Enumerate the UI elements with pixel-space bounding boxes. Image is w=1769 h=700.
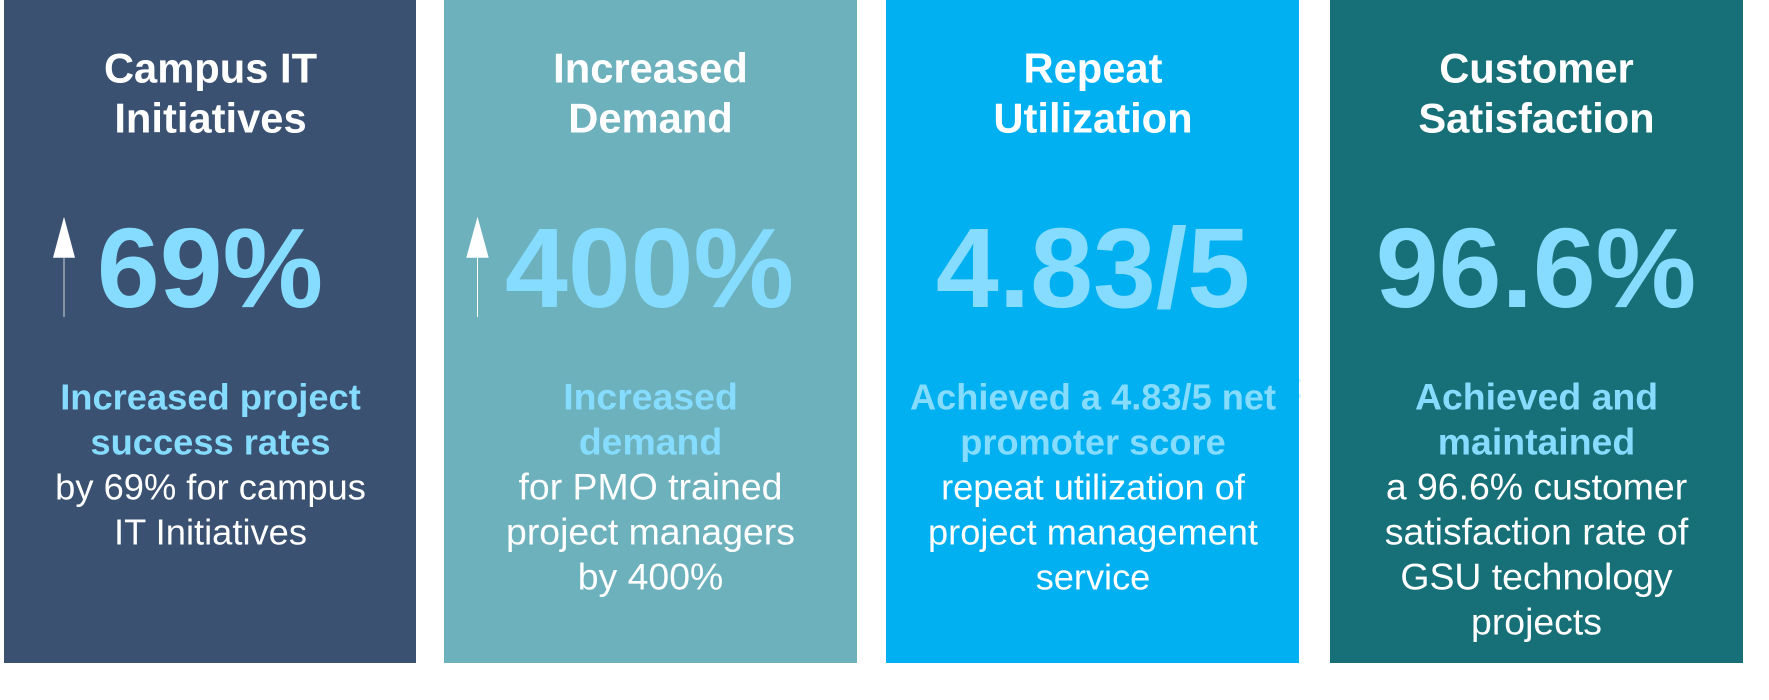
description: Achieved and (1415, 376, 1658, 418)
heading: Increased Demand: Increased (553, 44, 748, 92)
description: project management (928, 512, 1258, 552)
panel: Repeat Utilization (886, 0, 1301, 663)
heading: Campus IT Initiatives: Campus IT (104, 44, 318, 92)
big number: 69%: 69% (97, 205, 323, 331)
big number: 96.6%: 96.6% (1376, 205, 1696, 331)
description: maintained (1438, 420, 1635, 462)
description: success rates (90, 422, 331, 462)
heading: Repeat Utilization: Utilization (993, 94, 1193, 142)
big number: 4.83/5: 4.83/5 (936, 205, 1250, 331)
description: Achieved a 4.83/5 net (910, 376, 1276, 418)
description: promoter score (960, 422, 1226, 462)
description (506, 376, 795, 598)
heading: Repeat Utilization: Repeat (1023, 44, 1163, 92)
description: GSU technology (1400, 556, 1673, 598)
description: by 69% for campus (55, 466, 366, 508)
panel: Increased Demand (444, 0, 857, 663)
heading: Customer Satisfaction: Customer (1439, 44, 1634, 92)
heading: Campus IT Initiatives (104, 44, 318, 142)
description: Increased (563, 376, 738, 418)
description: IT Initiatives (114, 512, 307, 552)
heading: Customer Satisfaction (1418, 44, 1655, 142)
description: by 400% (578, 556, 723, 598)
heading: Customer Satisfaction: Satisfaction (1418, 94, 1655, 142)
icon: up arrow (53, 217, 75, 317)
description (55, 376, 366, 552)
description: service (1036, 556, 1150, 598)
description: a 96.6% customer (1386, 466, 1687, 508)
description (1385, 376, 1689, 642)
panel: Customer Satisfaction (1330, 0, 1743, 663)
heading: Increased Demand: Demand (568, 94, 733, 142)
panel: Campus IT Initiatives (4, 0, 416, 663)
description: Increased project (60, 376, 361, 418)
description: demand (579, 420, 722, 462)
description (910, 376, 1276, 598)
heading: Increased Demand (553, 44, 748, 142)
description: projects (1471, 600, 1602, 642)
icon: up arrow (466, 217, 489, 317)
big number: 400%: 400% (505, 205, 794, 331)
heading: Repeat Utilization (993, 44, 1193, 142)
description: for PMO trained (519, 466, 782, 508)
description: project managers (506, 510, 795, 552)
description: repeat utilization of (941, 466, 1246, 508)
description: satisfaction rate of (1385, 510, 1689, 552)
heading: Campus IT Initiatives: Initiatives (114, 94, 307, 142)
